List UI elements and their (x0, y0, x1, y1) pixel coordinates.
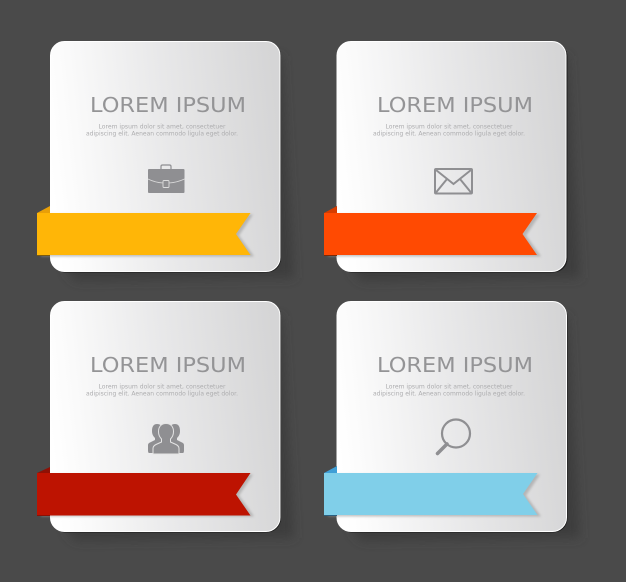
text block (86, 124, 238, 138)
panel: envelope card (324, 42, 580, 281)
icon: envelope (435, 169, 472, 194)
text block: Lorem ipsum dolor sit amet, consectetuer (98, 124, 226, 130)
ribbon: red (37, 467, 254, 516)
ribbon: orange (324, 206, 541, 256)
panel: briefcase card (37, 42, 294, 281)
heading: LOREM IPSUM (377, 353, 533, 377)
text block: Lorem ipsum dolor sit amet, consectetuer (98, 384, 226, 390)
text block: adipiscing elit. Aenean commodo ligula eget dolor. (373, 390, 525, 398)
icon: people (148, 424, 184, 454)
ribbon: yellow (37, 206, 254, 256)
text block: Lorem ipsum dolor sit amet, consectetuer (386, 124, 513, 130)
icon: briefcase (148, 165, 184, 193)
icon: magnifier (438, 420, 470, 454)
panel: search card (324, 302, 580, 541)
panel: people card (37, 302, 294, 541)
heading: LOREM IPSUM (90, 353, 246, 377)
ribbon: light blue (324, 466, 541, 516)
heading: LOREM IPSUM (90, 93, 246, 117)
text block: Lorem ipsum dolor sit amet, consectetuer (386, 384, 513, 390)
text block (373, 384, 525, 398)
card body (50, 42, 280, 272)
text block: adipiscing elit. Aenean commodo ligula eget dolor. (86, 390, 238, 398)
text block: adipiscing elit. Aenean commodo ligula eget dolor. (86, 130, 238, 138)
card body (337, 302, 566, 532)
card body (50, 302, 280, 532)
card body (337, 42, 566, 272)
text block: adipiscing elit. Aenean commodo ligula eget dolor. (373, 130, 525, 138)
text block (373, 124, 525, 138)
text block (86, 384, 238, 398)
heading: LOREM IPSUM (377, 93, 533, 117)
